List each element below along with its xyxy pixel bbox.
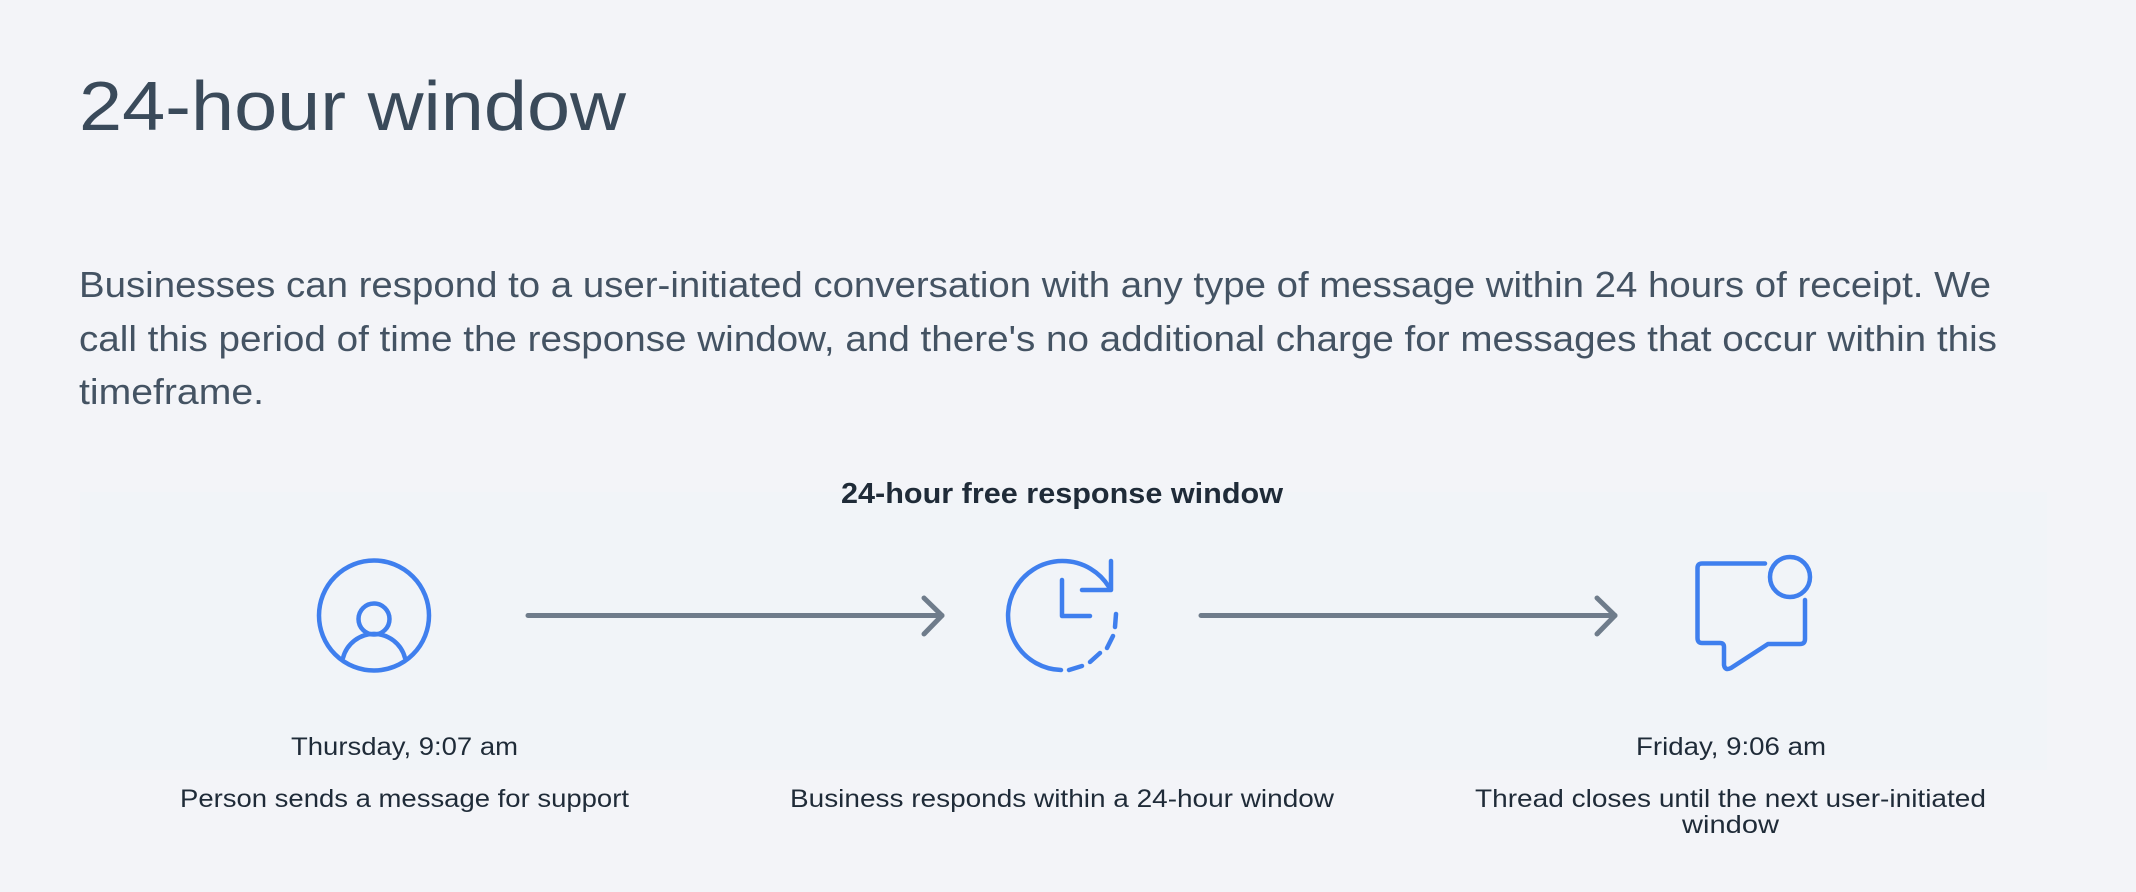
intro paragraph: timeframe.	[79, 371, 264, 412]
label: step 3 description: Thread closes until the next user-initiated	[1475, 785, 1986, 813]
icon: clock with dashed remainder	[1008, 561, 1116, 670]
icon: person	[319, 560, 429, 670]
label: step 1 description: Person sends a message for support	[180, 785, 629, 813]
intro paragraph	[79, 264, 1997, 412]
label: step 3 description: window	[1681, 811, 1780, 839]
label: step 1 time: Thursday, 9:07 am	[291, 733, 518, 761]
arrow: business to thread close	[1201, 598, 1615, 634]
icon: chat bubble with notification circle	[1698, 557, 1810, 669]
intro paragraph: Businesses can respond to a user-initiated conversation with any type of message within 24 hours of receipt. We	[79, 264, 1991, 305]
label: step 2 description: Business responds within a 24-hour window	[790, 785, 1335, 813]
label: step 3 description	[1475, 785, 1986, 839]
intro paragraph: call this period of time the response window, and there's no additional charge for messages that occur within this	[79, 318, 1997, 359]
title: 24-hour window	[79, 67, 626, 145]
diagram heading: 24-hour free response window	[841, 478, 1283, 510]
arrow: person to business	[528, 598, 942, 634]
label: step 3 time: Friday, 9:06 am	[1636, 733, 1826, 761]
